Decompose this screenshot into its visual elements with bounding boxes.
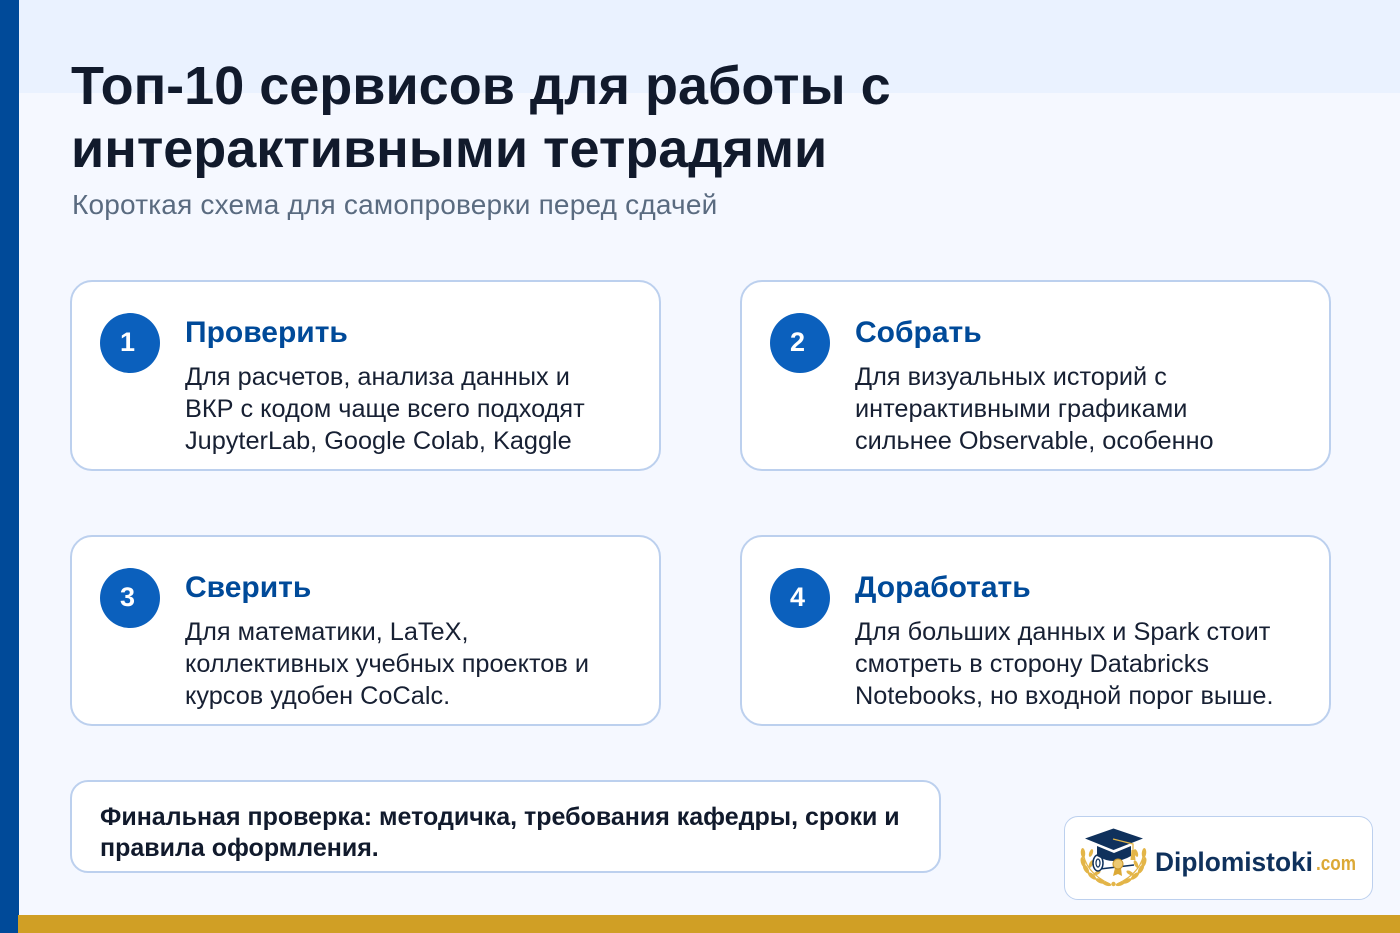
panel: step 2 bbox=[740, 280, 1331, 471]
step 2 heading: Собрать bbox=[855, 316, 982, 349]
step 2 text: Для визуальных историй с bbox=[855, 363, 1167, 391]
panel: step 3 bbox=[70, 535, 661, 726]
step 4 text: Для больших данных и Spark стоит bbox=[855, 618, 1270, 646]
step 2 text bbox=[855, 363, 1214, 455]
step 1 heading: Проверить bbox=[185, 316, 348, 349]
step 1 text: Для расчетов, анализа данных и bbox=[185, 363, 570, 391]
logo wordmark: Diplomistoki bbox=[1155, 847, 1313, 877]
step 2 text: сильнее Observable, особенно bbox=[855, 427, 1214, 455]
step 4 number bbox=[770, 568, 830, 628]
step 4 text: смотреть в сторону Databricks bbox=[855, 650, 1209, 678]
final check text: правила оформления. bbox=[100, 834, 379, 862]
step 2 text: интерактивными графиками bbox=[855, 395, 1187, 423]
panel: step 1 bbox=[70, 280, 661, 471]
title bbox=[71, 56, 891, 179]
title: интерактивными тетрадями bbox=[71, 119, 827, 179]
step 3 number: 3 bbox=[120, 582, 135, 612]
icon: seal bbox=[1113, 859, 1123, 876]
left accent bar bbox=[0, 0, 19, 933]
step 3 number bbox=[100, 568, 160, 628]
subtitle: Короткая схема для самопроверки перед сдачей bbox=[72, 189, 717, 220]
final check text bbox=[100, 803, 900, 862]
step 1 text: JupyterLab, Google Colab, Kaggle bbox=[185, 427, 572, 455]
step 3 text: Для математики, LaTeX, bbox=[185, 618, 469, 646]
step 3 heading: Сверить bbox=[185, 571, 311, 604]
step 2 number bbox=[770, 313, 830, 373]
icon: graduation cap bbox=[1085, 828, 1143, 861]
step 4 heading: Доработать bbox=[855, 571, 1031, 604]
step 1 number bbox=[100, 313, 160, 373]
step 1 text: ВКР с кодом чаще всего подходят bbox=[185, 395, 585, 423]
final check text: Финальная проверка: методичка, требования кафедры, сроки и bbox=[100, 803, 900, 831]
panel: step 4 bbox=[740, 535, 1331, 726]
step 4 text: Notebooks, но входной порог выше. bbox=[855, 682, 1274, 710]
title: Топ-10 сервисов для работы с bbox=[71, 56, 891, 116]
step 4 number: 4 bbox=[790, 582, 805, 612]
step 3 text bbox=[185, 618, 589, 710]
step 4 text bbox=[855, 618, 1274, 710]
icon: laurel wreath bbox=[1080, 848, 1147, 887]
logo domain: .com bbox=[1316, 853, 1356, 875]
panel: final check bbox=[70, 780, 941, 873]
top band bbox=[19, 0, 1400, 93]
icon: diploma scroll bbox=[1093, 855, 1134, 871]
step 1 text bbox=[185, 363, 585, 455]
step 1 number: 1 bbox=[120, 327, 135, 357]
logo artwork bbox=[1080, 828, 1356, 886]
logo panel bbox=[1064, 816, 1373, 900]
step 2 number: 2 bbox=[790, 327, 805, 357]
step 3 text: коллективных учебных проектов и bbox=[185, 650, 589, 678]
bottom accent bar bbox=[18, 915, 1400, 933]
step 3 text: курсов удобен CoCalc. bbox=[185, 682, 450, 710]
